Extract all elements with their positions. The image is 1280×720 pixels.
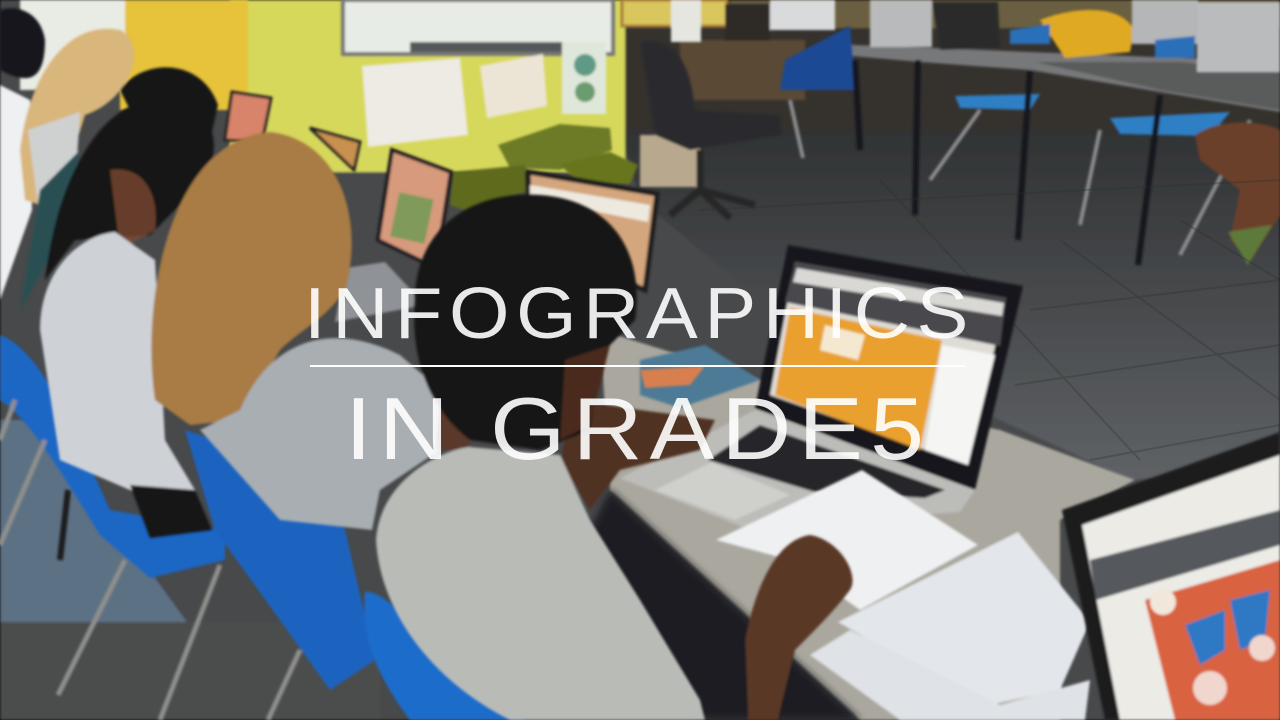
title divider bbox=[310, 365, 965, 367]
books bbox=[640, 345, 760, 408]
main laptop bbox=[620, 245, 1023, 528]
open notebook and papers bbox=[716, 470, 1090, 720]
title line one: INFOGRAPHICS bbox=[304, 274, 975, 354]
dark haired girl bbox=[45, 99, 214, 280]
blond girl bbox=[151, 132, 352, 425]
students bbox=[0, 8, 853, 720]
far-left children bbox=[0, 8, 45, 78]
wall boards and posters bbox=[20, 0, 835, 147]
front-right laptop bbox=[1062, 432, 1280, 720]
title line two: IN GRADE5 bbox=[345, 379, 931, 478]
boy bbox=[560, 400, 715, 510]
cushions, teacher chair and back tables bbox=[450, 0, 1280, 265]
floor tile seams bbox=[700, 180, 1280, 460]
boy's hand bbox=[745, 535, 853, 720]
table bbox=[600, 330, 1135, 720]
blue chairs bbox=[0, 335, 525, 720]
student laptops in the background bbox=[225, 92, 657, 322]
